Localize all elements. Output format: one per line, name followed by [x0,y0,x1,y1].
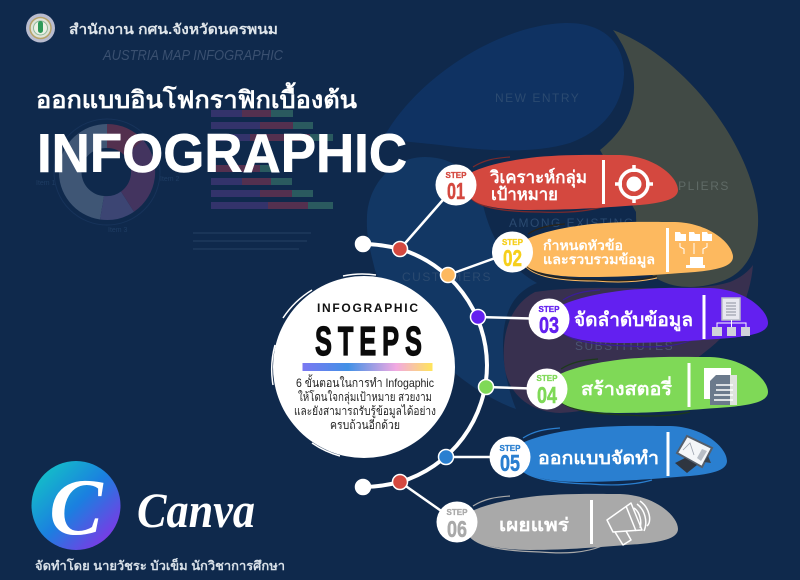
divider [666,228,669,272]
background blob: substitutes [504,265,753,413]
badge 3: STEP [539,305,560,314]
badge 5: STEP [500,444,521,453]
step 1 label [490,167,587,204]
background blob: new entry [385,23,624,150]
center description: ให้โดนใจกลุ่มเป้าหมาย สวยงาม [298,390,432,405]
credit line: จัดทำโดย นายวัชระ บัวเข็ม นักวิชาการศึกษา [35,558,285,573]
badge 6: STEP [447,508,468,517]
step 2 label [543,238,655,268]
faint map heading: AUSTRIA MAP INFOGRAPHIC [102,47,283,64]
badge 5: 05 [500,450,520,476]
icon: tablet [675,436,712,473]
faint donut chart [36,119,180,234]
badge 3: 03 [539,312,559,338]
step 3 label: จัดลำดับข้อมูล [574,309,693,332]
step 2 label: กำหนดหัวข้อ [543,238,623,253]
step 5 [490,426,727,485]
header text: สำนักงาน กศน.จังหวัดนครพนม [69,21,278,37]
badge 2: 02 [503,245,522,271]
divider [702,295,706,339]
timeline nodes [356,236,494,494]
badge 6: 06 [447,516,467,542]
step 2 label: และรวบรวมข้อมูล [543,252,655,268]
center description: 6 ขั้นตอนในการทำ Infogaphic [296,374,434,390]
step 5 label: ออกแบบจัดทำ [538,448,659,468]
canva logo: C [49,464,104,552]
pill 2 [522,222,733,282]
faint background labels: NEW ENTRY [495,91,580,105]
badge 6 [436,502,478,542]
badge 1: 01 [447,178,465,204]
faint background labels: SUPPLIERS [649,179,730,193]
pill 1 [467,155,678,212]
badge 4: 04 [537,382,557,408]
center heading: INFOGRAPHIC [317,301,418,315]
step 4 [526,357,768,416]
pill 6 [467,494,678,553]
faint background labels: SUBSTITUTES [575,339,674,353]
background blob: customers [367,157,537,409]
center description: และยังสามารถรับรู้ข้อมูลได้อย่าง [294,404,436,419]
divider [602,160,605,204]
step 6 [436,494,678,553]
step 1 [436,155,678,212]
title: INFOGRAPHIC [37,122,407,184]
gradient bar [302,363,432,371]
icon: megaphone [607,501,650,545]
faint donut chart: Item 2 [160,176,180,183]
divider [666,432,670,476]
subtitle: ออกแบบอินโฟกราฟิกเบื้องต้น [36,81,358,114]
faint background labels [402,91,730,353]
pill 4 [555,357,768,416]
divider [688,363,690,407]
badge 4: STEP [537,374,558,383]
pill 3 [557,288,768,347]
step 1 label: วิเคราะห์กลุ่ม [490,167,587,188]
faint background labels: CUSTOMERS [402,270,492,284]
logo [26,14,55,42]
badge 2: STEP [502,238,524,247]
panel: center circle [272,274,455,458]
faint stacked bar chart [193,110,333,250]
step 3 [528,288,768,347]
icon: folders and laptop [675,232,712,268]
icon: documents [704,368,737,405]
canva wordmark: Canva [137,482,255,538]
center title: STEPS [315,319,428,365]
badge 1 [436,164,476,206]
canva logo [32,461,120,552]
step 1 label: เป้าหมาย [491,185,558,204]
faint donut chart: Item 3 [108,227,128,234]
divider [590,500,593,544]
badge 2 [492,232,533,272]
badge 5 [490,436,530,478]
pill 5 [517,426,727,485]
badge 4 [526,368,568,410]
badge 3 [528,298,570,340]
timeline arc and connectors [363,185,549,522]
faint background labels: AMONG EXISTING [509,216,635,230]
background blob: suppliers [600,30,758,287]
icon: target [615,165,653,203]
icon: clipboard org chart [712,298,750,336]
center description [294,374,436,432]
faint donut chart: Item 1 [36,180,56,187]
step 6 label: เผยแพร่ [499,515,569,535]
step 2 [492,222,733,282]
center description: ครบถ้วนอีกด้วย [330,418,400,432]
badge 1: STEP [446,171,467,180]
step 4 label: สร้างสตอรี่ [581,376,672,399]
